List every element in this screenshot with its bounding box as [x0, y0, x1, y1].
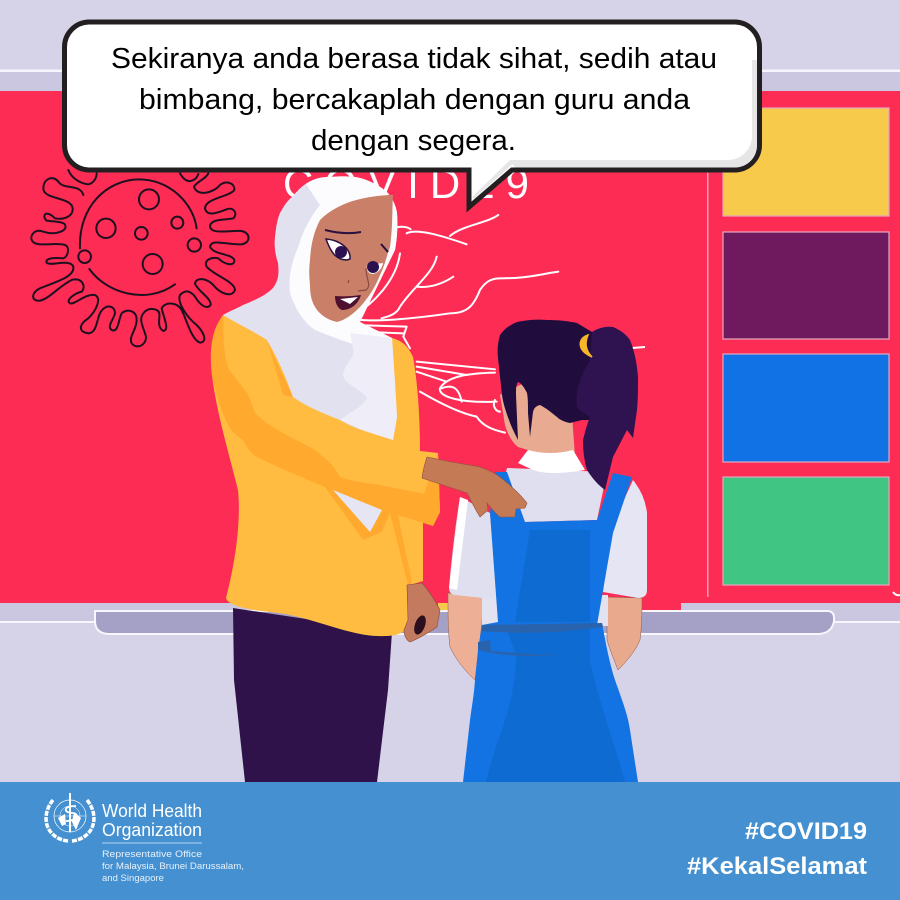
- hijab light drape: [340, 333, 397, 440]
- red chalkboard: [0, 91, 900, 611]
- purple panel: [723, 232, 889, 339]
- girl arms: [448, 593, 483, 680]
- hijab: [223, 176, 397, 440]
- white chalk line drawing: [353, 215, 558, 433]
- colour panels on board: [723, 108, 889, 585]
- left sleeve: [449, 497, 498, 598]
- blouse shading: [211, 316, 433, 585]
- footer band: [0, 782, 900, 900]
- hashtag COVID19: #COVID19: [745, 818, 867, 845]
- land masses: [58, 812, 81, 830]
- sleeve cuff shading: [424, 453, 440, 526]
- board text: COVID-19: COVID19: [283, 160, 529, 207]
- white chalk stub near girl: [632, 347, 645, 348]
- blue panel: [723, 354, 889, 462]
- bubble inner shade: [472, 60, 757, 199]
- green panel: [723, 477, 889, 585]
- white collar: [518, 450, 585, 473]
- right eye: [367, 263, 383, 274]
- message line 3: dengan segera.: [311, 125, 516, 157]
- footer band: Organization: [102, 819, 202, 840]
- staff and serpent: [69, 793, 71, 832]
- laurel wreath: [46, 800, 94, 841]
- yellow panel: [723, 108, 889, 216]
- girl hair: [498, 320, 592, 440]
- right sleeve: [603, 480, 647, 598]
- footer band: and Singapore: [102, 873, 164, 883]
- teacher hand on shoulder: [422, 457, 527, 517]
- eyebrows: [325, 230, 361, 233]
- message line 2: bimbang, bercakaplah dengan guru anda: [139, 84, 691, 116]
- WHO emblem: [46, 793, 94, 841]
- footer band: for Malaysia, Brunei Darussalam,: [102, 861, 244, 871]
- left eye: [326, 239, 350, 260]
- globe: [54, 800, 86, 832]
- WHO office text: Representative Office: [102, 849, 202, 859]
- teacher trousers: [233, 608, 392, 782]
- lower wall strip and floor: [0, 603, 431, 621]
- message line 1: Sekiranya anda berasa tidak sihat, sedih atau: [111, 43, 717, 75]
- blue pinafore: [463, 472, 638, 782]
- teacher face: [309, 195, 393, 322]
- shirt back: [504, 468, 607, 522]
- blouse under-panels: [482, 595, 608, 626]
- virus drawing: [31, 170, 249, 346]
- hair clip: [580, 335, 592, 357]
- schoolgirl figure: [448, 320, 647, 782]
- hijab base: [223, 176, 397, 440]
- teacher lower hand: [404, 583, 440, 642]
- girl neck and ear: [500, 380, 575, 456]
- hijab white fold: [289, 176, 397, 346]
- mouth: [335, 295, 361, 310]
- speech bubble: [64, 22, 760, 207]
- teacher figure: [211, 176, 440, 782]
- blouse triangle opening: [333, 490, 382, 532]
- ponytail: [577, 327, 638, 490]
- teacher yellow blouse: [211, 315, 440, 636]
- chalk tray: [95, 611, 834, 634]
- WHO name: World Health: [102, 800, 202, 821]
- hashtag KekalSelamat: #KekalSelamat: [687, 853, 867, 880]
- nose: [348, 268, 369, 291]
